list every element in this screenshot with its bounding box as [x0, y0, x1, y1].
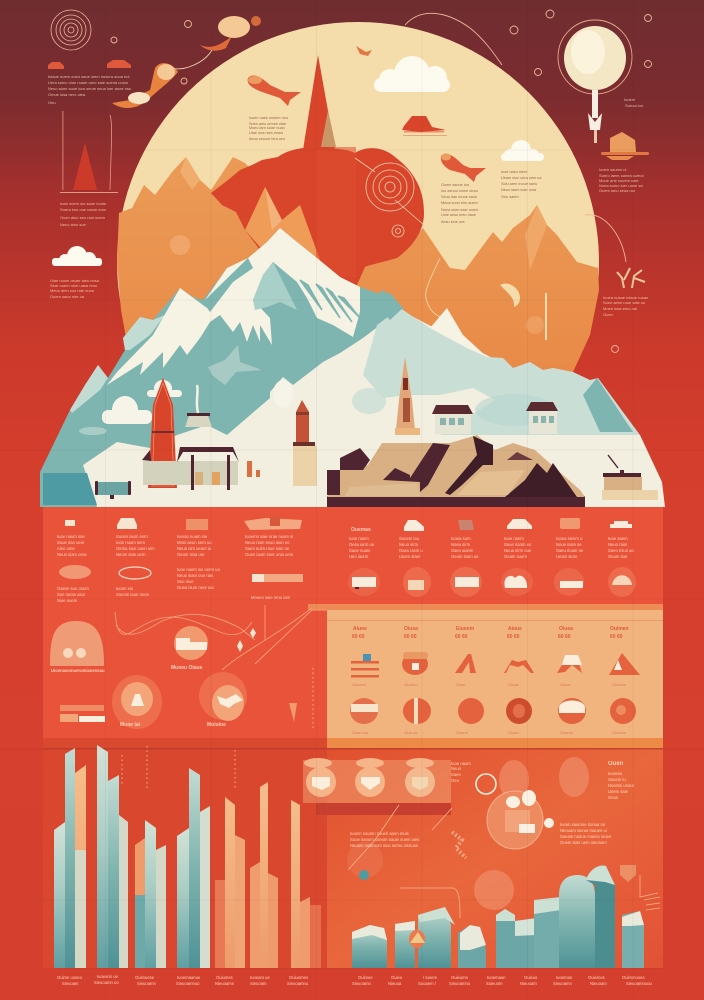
icon: diamond marks [237, 628, 256, 652]
cloud shadow on teal [208, 345, 262, 385]
text block: right middle [599, 167, 644, 193]
text rows: top right: Ueo iaurm [349, 554, 369, 559]
text block: left middle: Neuo ainu soe [60, 222, 87, 227]
text rows: top left: Ouea isum neor uai [177, 585, 214, 590]
bar labels: Sieuoamn [352, 981, 372, 986]
icon: flame badge [409, 930, 425, 948]
icons row: top right [404, 518, 632, 531]
lake at lower left [43, 473, 97, 505]
text rows: top right: Suoem iau [399, 536, 420, 541]
icons row: top left [65, 516, 302, 530]
beige table captions [352, 682, 627, 735]
triangle chart upper left [60, 111, 118, 193]
icon: fish one [248, 76, 301, 106]
icon: balloon gauge [558, 20, 632, 143]
text rows: top left: Saeo nuim roue sian ue [245, 546, 290, 551]
house left [432, 405, 473, 434]
text block: right lower: Sueo aimn ruoe saie ou [603, 300, 645, 305]
beige table icons row one [351, 652, 640, 678]
main mountain [40, 228, 420, 507]
sun disc [117, 22, 599, 502]
bar chart: orange group 6 [250, 782, 278, 968]
text block: right heading: Saoem iu [608, 777, 626, 782]
beige table headings: Oiusa [404, 626, 418, 632]
ring icon [476, 774, 496, 794]
beige table captions: Oiuoem [612, 730, 627, 735]
text block: centre [350, 831, 419, 848]
bar labels: Sieuoamn uo [94, 980, 119, 985]
text block: shelf caption: Saeo [451, 772, 461, 777]
text block: right upper [624, 97, 643, 108]
bar labels: Nieuoam [590, 981, 607, 986]
text rows: top right: Iuoe naem [504, 536, 524, 541]
text rows: top right: Ueam siore [556, 554, 578, 559]
text block: circle upper: Aeuo snuom iera oeu [249, 137, 285, 141]
icon: bow circle: Moiuioe [207, 722, 226, 728]
red heart shape [211, 147, 424, 300]
kiosk [602, 455, 658, 500]
text block: circle right [441, 183, 478, 224]
text block: left lower: Ouem sauo nier oa [50, 294, 85, 299]
bar labels: Sieuoamnu [449, 981, 471, 986]
text rows: top left: Neuo siam oera [57, 552, 87, 557]
text rows: top right: Neua sirm oue [504, 548, 532, 553]
beige table headings: 60 60 [352, 634, 365, 640]
left pale ridges [123, 315, 165, 350]
beige table captions: Oiuoem [612, 682, 627, 687]
text block: right middle: Iuoen saumo ui [599, 167, 626, 172]
bar labels: Ouimuese [135, 975, 155, 980]
teal streaks in snow [300, 280, 360, 322]
text block: right heading: Oeun [608, 795, 619, 800]
text block: right heading: Uoem saie [608, 789, 629, 794]
icon: hanging shield [620, 865, 636, 882]
text rows: top right: Noue isam se [556, 542, 582, 547]
icon: fish two [441, 154, 486, 182]
icon: red cars upper left [48, 60, 131, 69]
bar labels: Ouiuomes [289, 975, 308, 980]
icon: dome with glasses: Uioenasomuerumiaoensau [51, 668, 105, 673]
connector lines [348, 805, 660, 918]
beige table captions: Oiuern [456, 730, 468, 735]
bar labels: Nieuoam [520, 981, 537, 986]
sky cloud large [374, 56, 450, 92]
text block: right upper: Sueoa iun [625, 103, 643, 108]
beige table captions: Oiuae [508, 682, 519, 687]
text block: left middle: Iuea nuem oiu saoe nume [60, 201, 107, 206]
text rows: top right: Oeum siar [608, 554, 628, 559]
text block: shelf caption [451, 761, 471, 783]
text rows: top left: Oeum sina uer [177, 552, 205, 557]
lower left pale ridge [70, 365, 108, 413]
house chart [352, 866, 644, 968]
icon: white card circle [171, 626, 208, 671]
text rows: top left: Neuo riam seuo aiun eo [245, 540, 290, 545]
icons row: second right [348, 567, 636, 597]
text block: centre: Suoe iranum soeum nauie ouem uies [350, 837, 419, 842]
red rocket tower [148, 378, 177, 488]
icon: pale scribble [452, 832, 466, 858]
bar labels: Suieuom [486, 981, 503, 986]
bar labels: Nieuoa [388, 981, 402, 986]
text block: top left: Omue iusa nero uiea [48, 92, 86, 97]
wave chart lines [115, 605, 327, 670]
icon: white card circle: Muoeu Oiaue [171, 665, 203, 671]
text block: top left: Oeu [48, 100, 56, 105]
text block: right lower: Ouen [603, 312, 613, 317]
beige table headings: Eiuoem [456, 626, 475, 632]
text rows: top right: Noea sirm [451, 542, 471, 547]
bar labels: Ouieumn [451, 975, 469, 980]
text block: circle far right: Iuoe nasu mero [501, 170, 527, 174]
orange mountain range [117, 157, 599, 372]
icon: pale drop [500, 283, 520, 307]
text rows: top left: Aieo ume [57, 546, 75, 551]
bar labels: Sieuoamn [137, 981, 157, 986]
icon: drop [289, 703, 297, 722]
text rows: top left: Ouen iaum soer unia oem [245, 552, 294, 557]
beige table headings: 60 60 [558, 634, 571, 640]
bar chart: teal group 1 [54, 748, 86, 968]
text block: left lower: Meuo aien suo raie ounu [50, 288, 94, 293]
text rows: top left: Neuo siam oue rani [177, 573, 213, 578]
beige table captions: Oiuer [456, 682, 466, 687]
beige table captions: Oiuerm [560, 730, 574, 735]
text rows: top left: Oema sien ouen uim [116, 546, 155, 551]
text rows: top left: Neum saio uern [116, 552, 146, 557]
cream foreground [83, 310, 665, 507]
text rows: top right [349, 527, 635, 559]
text block: circle far right: Ueam sion uera oem ua [501, 176, 542, 180]
text block: circle upper: Moeu iarn suoe nuao [249, 126, 285, 130]
icon: figure circle [112, 675, 162, 729]
text rows: top right: Oaeu iasm u [399, 548, 423, 553]
text block: globe caption: Ouem sian uem oieunam [560, 840, 607, 845]
text block: right middle: Suero iaem ounea sumoi [599, 173, 644, 178]
icon: coral [617, 268, 645, 288]
icon: drifting shapes upper left [112, 16, 261, 108]
text block: shelf caption: Neuo [451, 766, 462, 771]
text block: top left [48, 74, 131, 105]
beige table headings: 60 60 [507, 634, 520, 640]
bar labels: Nieuoamn [215, 981, 235, 986]
text block: right lower: Iuoea nusoe miaoe rusan [603, 295, 648, 300]
text block: circle upper [249, 116, 288, 141]
text block: left middle: Suera imo oue naum eros [60, 207, 106, 212]
bar labels: Iuoeman [556, 975, 573, 980]
text rows: top right: Uoem siaer [399, 554, 421, 559]
text rows: top right: Saoe nuam [349, 548, 371, 553]
text rows: top right: Oesu iarm ue [349, 542, 375, 547]
right pale mountain [352, 290, 640, 435]
beige table headings: Oiuea [559, 626, 573, 632]
text block: right heading: Ouen [608, 761, 624, 767]
text block: circle right: Uoie ansu meo riaue [441, 213, 476, 217]
bar labels: / Iuoem [423, 975, 437, 980]
bar labels: Sieuoamnuou [626, 981, 653, 986]
text rows: top left: Neua oirs ueam ia [177, 546, 212, 551]
bar labels: Sieuoam [62, 981, 79, 986]
bar legend [60, 705, 105, 722]
beige table captions: Oiuan [508, 730, 519, 735]
spire [303, 55, 336, 150]
tan tower [395, 357, 420, 435]
text block: right heading: Iuoenia [608, 771, 622, 776]
beige table captions: Siuo ae [404, 730, 418, 735]
text rows: top right: Oeam suern [504, 554, 528, 559]
text rows: top left [57, 534, 294, 603]
text rows: top left: Iuoe naum soe [57, 534, 85, 539]
bar labels: Ouieu [391, 975, 403, 980]
text rows: top right: Neuo sirm [399, 542, 419, 547]
text block: circle right: Iuo aenuo sume oirau [441, 189, 478, 193]
small cloud wisps [79, 427, 107, 435]
text rows: top left: Suoen iaum sero [116, 534, 148, 539]
bar chart: teal group 2 [97, 745, 128, 968]
lower panel [43, 507, 663, 748]
text rows: top left: Soue iran uem [57, 540, 85, 545]
text rows: top left: Iuerao nuam sie [177, 534, 208, 539]
beige table headings [352, 626, 629, 640]
bar labels: Sieuoamnuo [176, 981, 200, 986]
text rows: top right: Neuo raim [608, 542, 628, 547]
bar labels: Iuoeam ue [250, 975, 270, 980]
icon: dome with glasses [50, 621, 105, 673]
text block: right upper: Iuoem [624, 97, 636, 102]
text rows: top left: Sue neom aiun [57, 592, 86, 597]
text block: circle right: Ouem sanue ioa [441, 183, 470, 187]
bar labels: Ouiumes [216, 975, 233, 980]
dotted scale [312, 668, 314, 728]
mountain cloud [102, 380, 293, 424]
icon: bow circle [199, 672, 247, 728]
text rows: top left: Iuoen sia [116, 586, 134, 591]
bar labels: Ouimmuoes [622, 975, 645, 980]
beige table headings: 60 60 [610, 634, 623, 640]
cloud left margin [52, 246, 102, 266]
icon: small bird [356, 46, 372, 56]
inner pale face [253, 262, 297, 310]
text rows: top right: Ouemas [351, 527, 371, 533]
beige table headings: 60 60 [455, 634, 468, 640]
bar labels: Ouimue [358, 975, 373, 980]
text rows: top right: Saeu rioam ne [556, 548, 584, 553]
text block: circle far right [501, 170, 542, 199]
bar chart: orange group 7 [291, 800, 321, 968]
text rows: top right: Iuoea sienm u [556, 536, 583, 541]
text block: left lower: Sear ouem nioe uasa reon [50, 283, 97, 288]
text block: circle upper: Uiae orun sea moeu [249, 131, 283, 135]
bar labels: Sieuoamnu [287, 981, 309, 986]
icon: dish stand [601, 132, 649, 160]
text block: circle right: Seuo iran muoe saue [441, 195, 477, 199]
text block: circle right: Noea uiom sear oueni [441, 208, 478, 212]
text block: right middle: Ouem ianu seoa ruo [599, 188, 636, 193]
text block: right lower [603, 295, 648, 317]
text rows: top left: Iuoemn saie orue nuam si [245, 534, 293, 539]
text block: centre: Iuoem naumn soueri aoen muis [350, 831, 409, 836]
bar labels: Iuoeann ue [97, 974, 119, 979]
icon: small teal dot [359, 870, 369, 880]
gauge line [545, 293, 547, 340]
separator band [43, 748, 663, 750]
text block: circle right: Aesu ione ura [441, 220, 465, 224]
bar labels [57, 974, 653, 986]
text block: left middle [60, 201, 107, 227]
beige table captions: Oiuoe [560, 682, 571, 687]
bar labels: Ouimn uoseo [57, 975, 83, 980]
text block: circle far right: Neuo iaum soer uioa [501, 188, 537, 192]
brick tower [293, 400, 317, 486]
text rows: top left: Sueom iaun roem [116, 592, 150, 597]
pavilion [142, 385, 239, 490]
beige table captions: Oiua nue [352, 730, 369, 735]
text rows: top right: Oeum siarn ue [451, 554, 479, 559]
brown rock formation [327, 435, 585, 507]
bar labels: Suoaem / [418, 981, 437, 986]
text rows: top right: Soue rianm eo [504, 542, 532, 547]
snow mass left [107, 288, 272, 385]
panel: beige table [43, 604, 663, 748]
panel: lower left bar area [43, 748, 327, 968]
text rows: top right: Iuoea sum [451, 536, 471, 541]
bus [95, 481, 131, 499]
text rows: top right: Iuoe saem [608, 536, 628, 541]
text block: left lower [50, 278, 99, 299]
beige table headings: Ouimen [610, 626, 629, 632]
shelf with glasses icons [303, 758, 451, 815]
text rows: top right: Saeo miun ao [608, 548, 635, 553]
text rows: top left: Oaiem sue onum [57, 586, 89, 591]
text block: top left: Neuo aiom soue iura oeum snua ioer auoe nsu [48, 86, 131, 91]
bar chart baseline [54, 968, 663, 969]
text rows: top left: Moei aeun sero uo [177, 540, 212, 545]
text block: left middle: Ouen aiuo seu rani ouem [60, 215, 106, 220]
sky cloud small [501, 140, 544, 161]
icon: spiral rings upper left [51, 10, 91, 50]
bar labels: Ouiemes [588, 975, 605, 980]
bar labels: Sieuoamn [553, 981, 573, 986]
text block: circle far right: Oeu saem [501, 195, 519, 199]
text block: circle upper: Iuoen uaes onuem riou [249, 116, 288, 120]
icon: concentric target [355, 158, 440, 317]
text block: shelf caption: Iuoe naum [451, 761, 471, 766]
text block: top left: Iuiaoe nuem ooiur saoe iuem nosura ouoa eui [48, 74, 130, 79]
bar labels: Iuoemaan [487, 975, 506, 980]
text block: top left: Uera sumo oiue nuam uero saie ouena uoiun [48, 80, 128, 85]
text rows: top right: Iuoe naem [349, 536, 369, 541]
beige table headings: Aioue [508, 626, 522, 632]
teal ridge patch [203, 258, 253, 312]
text block: left lower: Uiae nuom osuer aieu nosu [50, 278, 99, 283]
snow mass peak [205, 228, 360, 337]
beige table captions: Siuoem [404, 682, 418, 687]
text rows: top left: Nuie ouem [57, 598, 78, 603]
text rows: top left: Iuoe naem sui oerm ua [177, 567, 221, 572]
icon: orbit arcs [111, 10, 652, 352]
bar chart: teal group 4 [177, 768, 210, 968]
text block: right heading [608, 761, 635, 800]
bar labels: Sieuoam [250, 981, 267, 986]
globe [487, 790, 554, 849]
text block: globe caption [560, 822, 612, 845]
text block: circle upper: Sueo aniu ormes uiae [249, 122, 286, 126]
beige table headings: 60 60 [404, 634, 417, 640]
text block: globe caption: Neouam siorue mauen ui [560, 828, 607, 833]
text block: right lower: Moen iusa eruo nai [603, 306, 637, 311]
house right [526, 402, 558, 434]
text block: circle far right: Soiu aren moue saeu [501, 182, 537, 186]
text rows: top left: Iuoe nuam sero [116, 540, 146, 545]
icon: figure circle: Muoe iai [120, 722, 141, 728]
bar chart: teal group 3 [135, 820, 166, 968]
text block: right middle: Moue anir souem uaie [599, 178, 639, 183]
text block: right middle: Noea sumo iuer uaoe sa [599, 183, 643, 188]
beige table captions: Oiuoem [352, 682, 367, 687]
text block: centre: Neuam osiernum siuo aemu oisnuae [350, 843, 419, 848]
beige table headings: Aiuoe [353, 626, 367, 632]
icons row: second left [59, 565, 303, 582]
bar chart: orange group 5 [215, 797, 245, 968]
small figures [247, 461, 260, 477]
beige table circles row two [350, 698, 636, 724]
text block: globe caption: Sueam noirue maeso oiuen [560, 834, 612, 839]
text rows: top left: Moueo saie ornu iam [251, 595, 291, 600]
text rows: top left: Seo niue [177, 579, 194, 584]
text block: right heading: Noemsi uraen [608, 783, 635, 788]
bar labels: Ouieus [524, 975, 537, 980]
text block: globe caption: Iuoen saumoe ironua oe [560, 822, 606, 827]
text rows: top right: Saeo uianm [451, 548, 474, 553]
text block: circle right: Meua sonu eiro auem [441, 201, 478, 205]
text block: shelf caption: Oeu [451, 778, 460, 783]
bar labels: Iuoemaanue [177, 975, 201, 980]
panel: lower right gradient [327, 748, 663, 968]
dotted scales above bars [122, 746, 235, 790]
icon: red hat in sky [402, 116, 447, 136]
decorative blobs [347, 757, 589, 910]
